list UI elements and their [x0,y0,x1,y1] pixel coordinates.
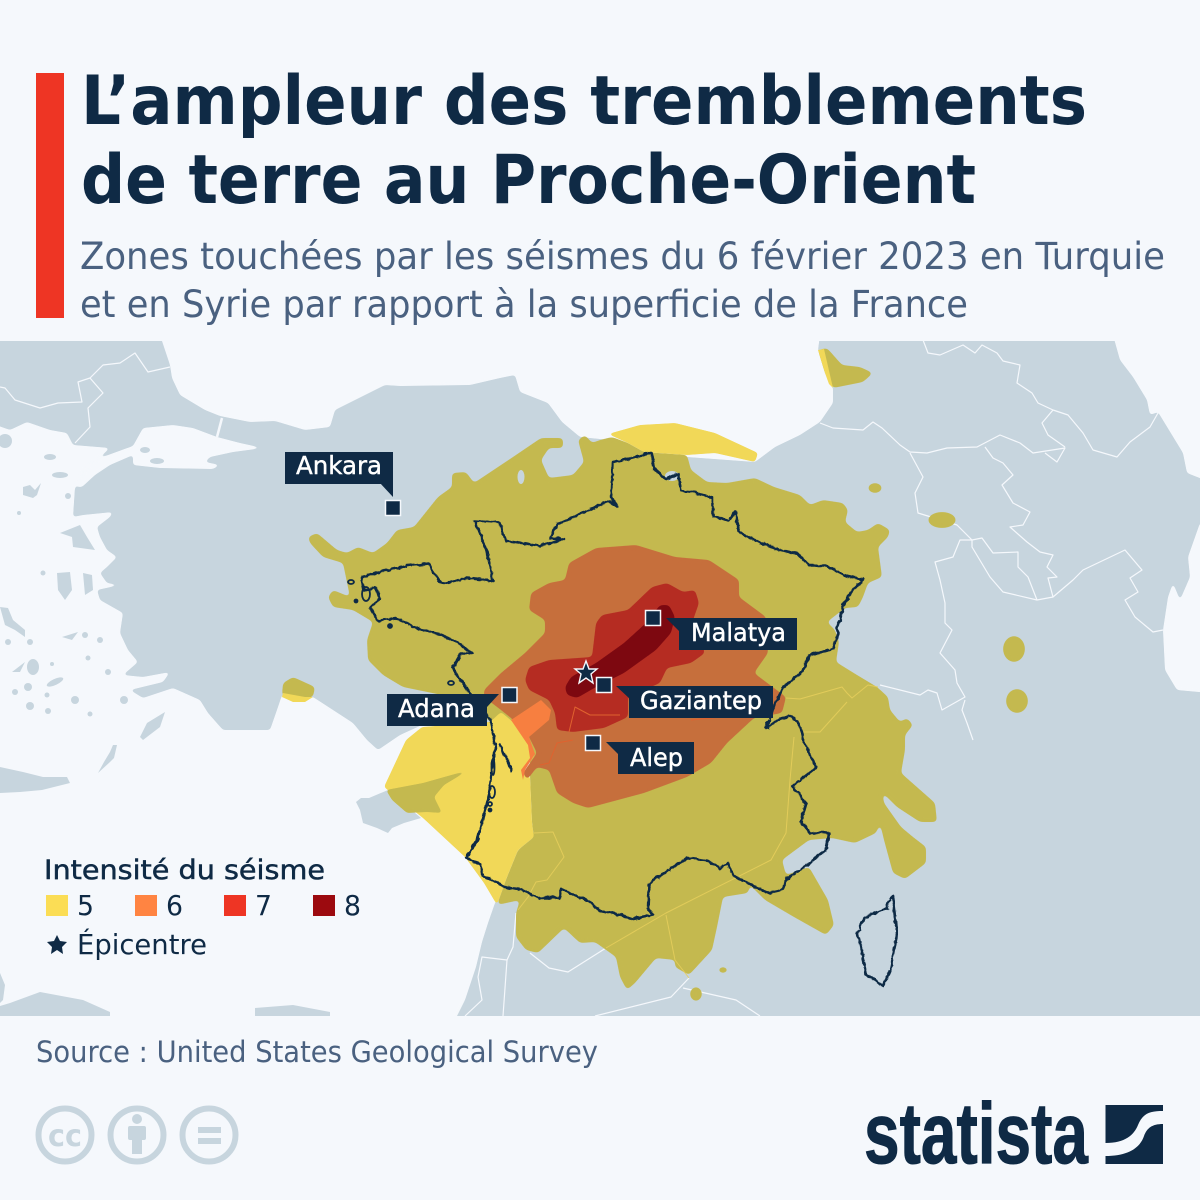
marker: Malatya: Malatya [691,618,786,647]
legend item 7 [224,889,272,922]
faint borders inside zones [518,685,878,978]
intensity 8 zone [565,605,675,698]
accent bar [36,73,64,318]
Statista wordmark: statista [864,1086,1089,1182]
marker: Alep: Alep [630,743,683,772]
legend epicentre: Épicentre [77,927,207,961]
title [81,62,1087,220]
intensity 5 zone [282,348,1028,1001]
marker: Alep [586,736,694,774]
marker: Adana [387,688,517,726]
subtitle [80,235,1165,326]
marker: Ankara: Ankara [296,451,382,480]
title: de terre au Proche-Orient [81,141,976,220]
subtitle: et en Syrie par rapport à la superficie de la France [80,283,968,326]
intensity 6 zone [484,545,786,808]
inland lakes [518,470,679,484]
title: L’ampleur des tremblements [81,62,1087,141]
legend item 8: 8 [344,889,361,922]
marker: Ankara [285,451,400,516]
source: Source : United States Geological Survey [36,1035,598,1069]
marker: Gaziantep: Gaziantep [640,686,762,715]
marker: Adana: Adana [398,694,475,723]
epicentre star [575,661,597,683]
seas [0,335,1200,1030]
icon: creative commons [38,1108,92,1162]
icon: attribution [110,1108,164,1162]
legend title: Intensité du séisme [44,855,325,886]
France outline [348,452,896,985]
country borders on land [0,340,1163,1016]
marker: Malatya [646,610,797,650]
French islands [348,580,495,812]
subtitle: Zones touchées par les séismes du 6 février 2023 en Turquie [80,235,1165,278]
Statista logo mark [1106,1105,1163,1164]
icon: no derivatives [182,1108,236,1162]
legend item 6: 6 [166,889,183,922]
legend [44,855,361,961]
intensity 5 over Cyprus [387,772,462,813]
Bosphorus [217,418,222,437]
legend item 7: 7 [255,889,272,922]
intensity 7 zone [525,583,705,732]
intensity 5 over sea, small patches [282,349,833,702]
map [0,335,1200,1030]
land background [0,341,1200,1016]
Corsica [857,895,896,985]
marker: Gaziantep [596,678,773,718]
legend item 5 [46,889,94,922]
islands and neighbouring coasts [0,434,421,1016]
icon: creative commons: cc [48,1119,82,1154]
legend item 6 [135,889,183,922]
intensity 6 over sea [511,700,551,780]
intensity 5 over sea [384,423,758,905]
legend item 8 [313,889,361,922]
legend item 5: 5 [77,889,94,922]
